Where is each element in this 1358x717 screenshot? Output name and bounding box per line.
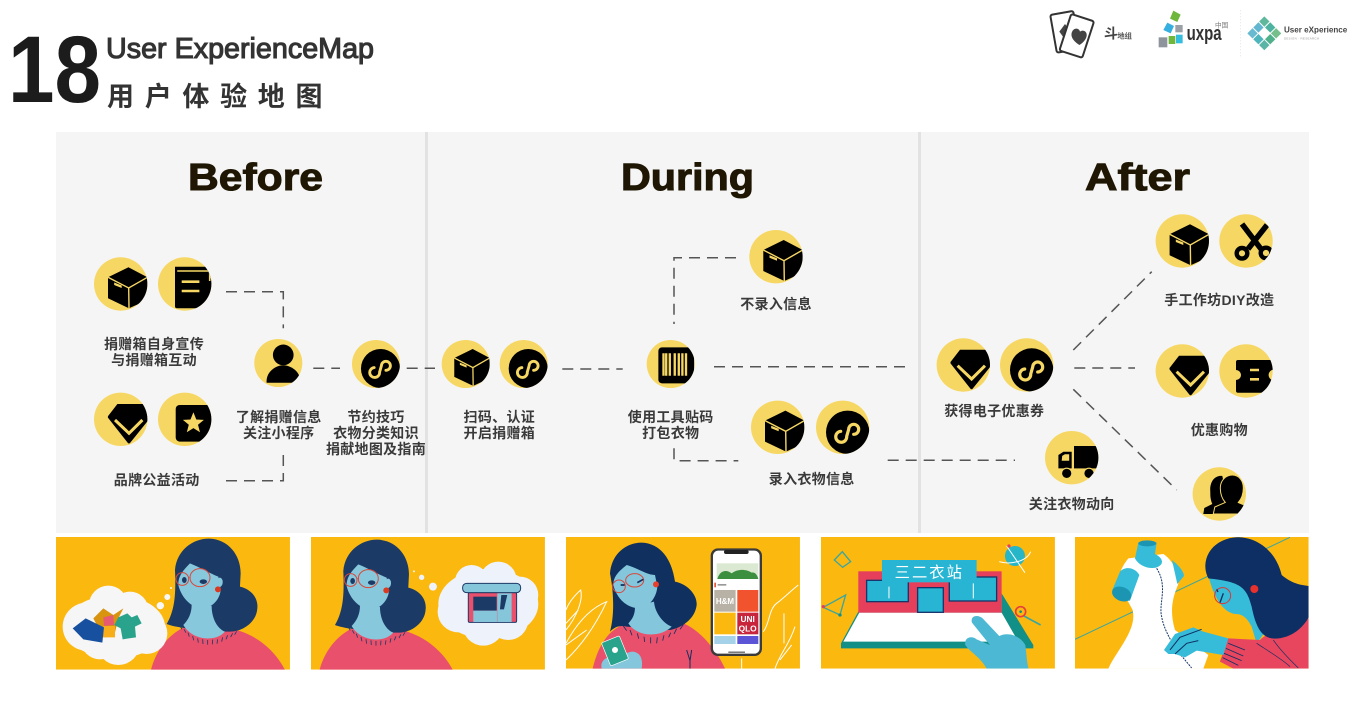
label: tag clothes [628,409,714,441]
logo: playing cards: 地组 [1117,31,1133,40]
icon: barcode [647,340,695,388]
illustration: woman thinking of clothes [56,537,290,670]
icon: coupon gem [937,338,993,392]
illustration: woman with phone app: UNI [740,614,755,624]
logo: uxpa: uxpa [1187,23,1222,45]
label: box promotion: 与捐赠箱互动 [111,352,197,368]
label: tag clothes: 使用工具贴码 [628,409,714,425]
icon: scan mini program [500,340,548,388]
icon: star [158,393,216,446]
label: scan and open: 开启捐赠箱 [464,425,535,441]
illustration: woman sewing dress [1075,537,1309,669]
icon: box with info [751,401,804,454]
label: scan and open: 扫码、认证 [464,409,535,425]
heading: After: After [1085,157,1190,199]
label: tag clothes: 打包衣物 [642,425,699,441]
illustration: clothes store [821,537,1055,669]
label: learn info [236,409,322,441]
icon: box no info [749,230,803,283]
icon: coupon mini [1000,338,1053,392]
label: tips [326,409,426,457]
label: follow clothes: 关注衣物动向 [1029,496,1115,512]
illustration: woman thinking of store [311,537,545,671]
illustration: woman with phone app: QLO [739,623,757,633]
logo: uxpa: 中国 [1215,20,1229,29]
title: english: User ExperienceMap [106,33,374,65]
icon: shopping gem [1156,344,1212,398]
connectors [226,258,1177,490]
label: enter info: 录入衣物信息 [769,471,855,487]
icon: ticket [1219,344,1276,398]
logo: playing cards [1050,11,1133,58]
label: tips: 捐献地图及指南 [326,441,426,457]
icon: person [254,339,302,387]
icon: donation box [94,257,147,311]
label: get coupon: 获得电子优惠券 [944,403,1044,419]
illustration: woman with phone app: H&M [716,597,734,606]
icon: mini program [352,340,400,388]
label: box promotion [104,336,204,368]
label: tips: 节约技巧 [347,409,405,425]
icon: book [158,257,212,311]
logo: uxpa [1159,11,1229,47]
logo: playing cards: 斗 [1104,26,1118,42]
label: discount shopping: 优惠购物 [1191,422,1248,438]
icon: workshop box [1156,214,1209,268]
icon: scan box [442,340,490,388]
heading: Before: Before [188,157,323,199]
icon: gem badge [94,393,151,446]
label: tips: 衣物分类知识 [333,425,419,441]
icon: truck [1045,431,1100,484]
label: no info: 不录入信息 [740,296,812,312]
illustration: woman with phone app [566,537,800,670]
illustration: clothes store: 三二衣站 [895,565,964,582]
label: learn info: 了解捐赠信息 [236,409,322,425]
logos [1050,10,1348,58]
icon: mini with info [816,401,869,454]
label: learn info: 关注小程序 [243,425,314,441]
panel: journey background [56,132,1309,533]
logo: user experience: User eXperience [1284,26,1348,35]
label: box promotion: 捐赠箱自身宣传 [104,336,204,352]
logo: user experience [1241,10,1348,57]
logo: user experience: DESIGN · RESEARCH [1284,36,1319,40]
icon: people [1193,467,1249,521]
label: workshop: 手工作坊DIY改造 [1164,292,1274,308]
label: scan and open [464,409,535,441]
icon: scissors [1219,214,1273,268]
label: brand charity: 品牌公益活动 [114,472,200,488]
title: chinese: 用户体验地图 [107,82,333,112]
title number: 18 [8,17,101,123]
heading: During: During [621,157,754,199]
